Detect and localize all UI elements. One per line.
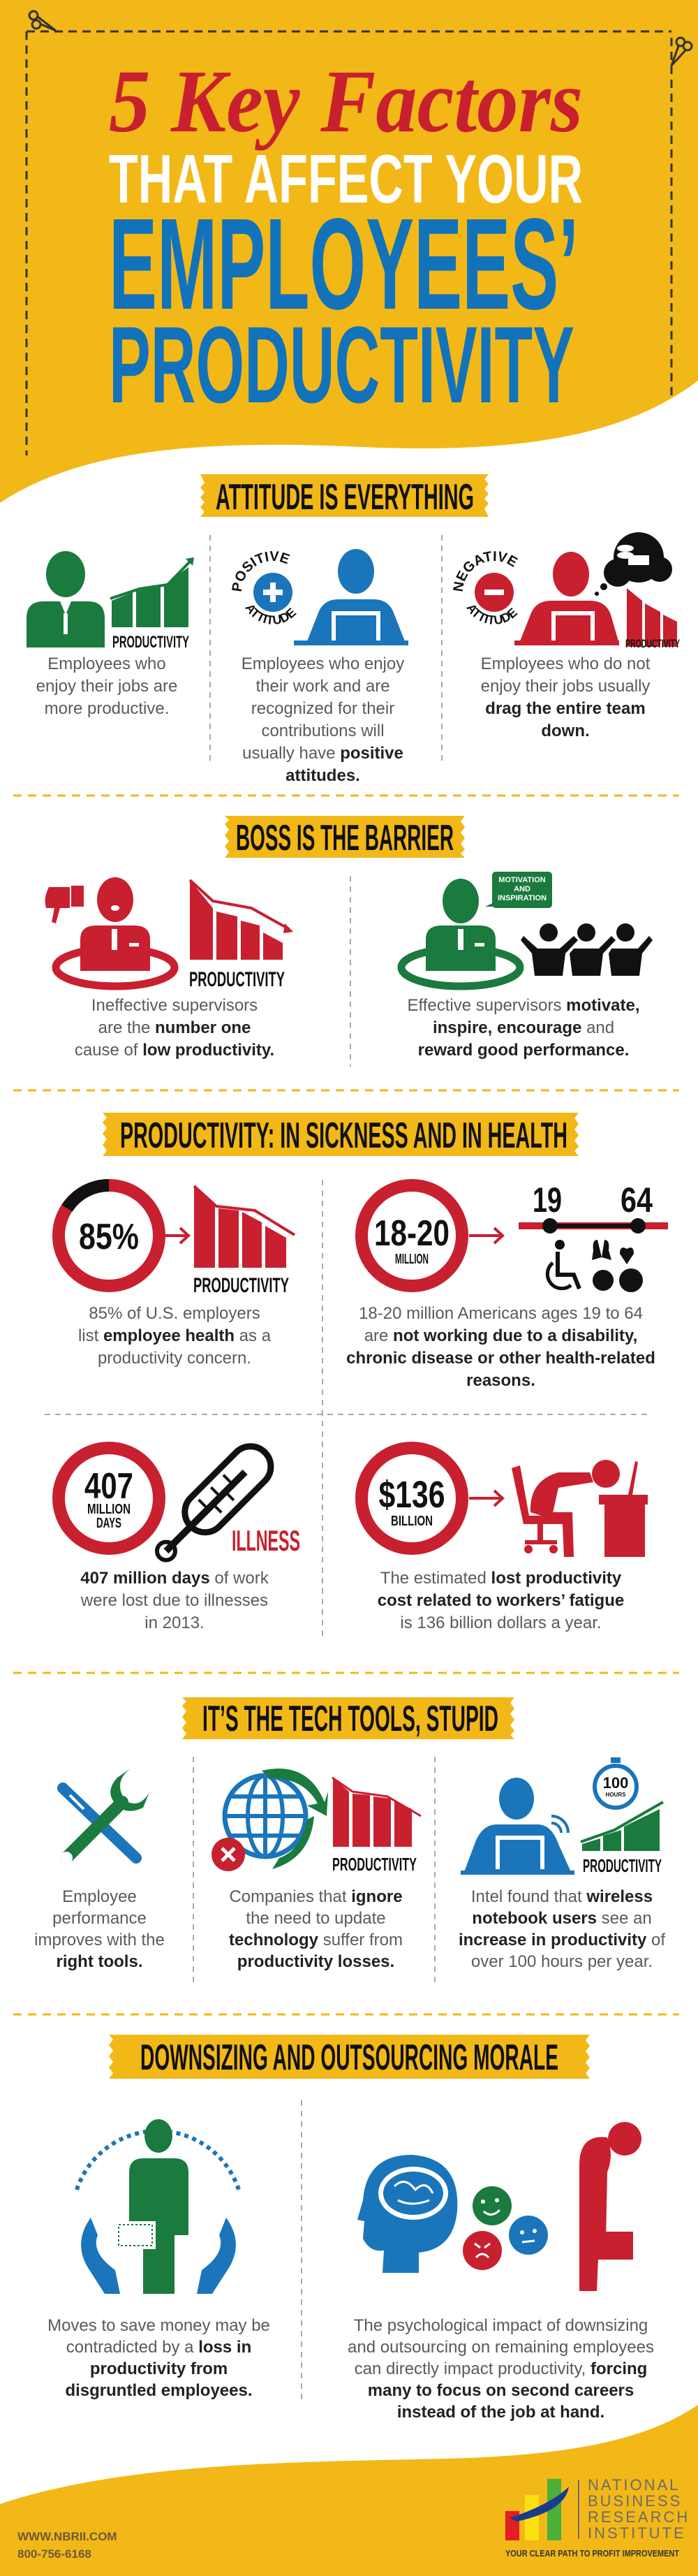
icon: scissors right: [671, 38, 692, 66]
banner: boss is the barrier: BOSS IS THE BARRIER: [236, 818, 454, 858]
title: [109, 52, 583, 426]
stat: 85%: 85%: [79, 1217, 139, 1257]
stat: 18-20 million: 18-20: [374, 1213, 450, 1254]
stat: $136 billion: $136: [378, 1474, 445, 1516]
icon: effective supervisor: AND: [514, 885, 530, 893]
text: effective supervisors: reward good performance.: [418, 1041, 629, 1060]
text: ineffective supervisors: cause of low productivity.: [75, 1041, 274, 1060]
text: ignore technology: productivity losses.: [237, 1952, 394, 1971]
icon: productivity drop chart: [332, 1778, 421, 1875]
text: intel wireless: Intel found that wireless: [471, 1887, 653, 1906]
text: effective supervisors: Effective supervisors motivate,: [407, 996, 640, 1015]
text: 18-20 million: [346, 1304, 655, 1390]
logo: national business research institute: NATIONAL: [588, 2476, 680, 2494]
icon: positive attitude: POSITIVE: [232, 551, 290, 592]
text: intel wireless: notebook users see an: [472, 1909, 652, 1928]
text: 85% employers: 85% of U.S. employers: [89, 1304, 260, 1323]
text: $136 billion: cost related to workers’ fatigue: [378, 1591, 624, 1610]
text: $136 billion: [378, 1569, 624, 1632]
stat: $136 billion: [362, 1448, 648, 1557]
text: attitude col 2: Employees who enjoy: [242, 654, 404, 673]
text: save money: Moves to save money may be: [47, 2316, 270, 2335]
text: attitude col 2: [242, 654, 405, 785]
footer contact: 800-756-6168: [17, 2547, 91, 2561]
text: save money: [47, 2316, 270, 2400]
icon: productivity drop chart: PRODUCTIVITY: [332, 1854, 417, 1875]
icon: positive attitude: [232, 549, 408, 645]
stat: 85%: [59, 1185, 295, 1297]
text: attitude col 2: contributions will: [261, 722, 385, 740]
footer background: [0, 2405, 698, 2576]
text: attitude col 2: their work and are: [255, 677, 390, 696]
icon: wireless notebook user: 100: [603, 1774, 628, 1792]
text: psychological impact: The psychological impact of downsizing: [354, 2316, 648, 2335]
text: attitude col 1: more productive.: [45, 699, 169, 718]
text: $136 billion: is 136 billion dollars a year.: [400, 1613, 602, 1632]
text: psychological impact: many to focus on second careers: [368, 2381, 634, 2400]
icon: scissors left: [29, 11, 56, 31]
text: 18-20 million: 18-20 million Americans ages 19 to 64: [359, 1304, 643, 1323]
icon: dejected worker: [579, 2122, 641, 2291]
stat: $136 billion: BILLION: [391, 1514, 433, 1529]
stat: 407 million days: ILLNESS: [232, 1524, 300, 1557]
text: tools: Employee: [62, 1887, 137, 1906]
icon: green employee with rising productivity: PRODUCTIVITY: [112, 633, 189, 652]
text: intel wireless: increase in productivity of: [459, 1931, 665, 1949]
icon: effective supervisor: [401, 872, 653, 986]
text: attitude col 2: recognized for their: [251, 699, 394, 718]
icon: negative attitude: ATTITUDE: [466, 605, 518, 624]
text: intel wireless: over 100 hours per year.: [471, 1952, 653, 1971]
logo: national business research institute: [505, 2476, 690, 2559]
text: 407 million days: in 2013.: [144, 1613, 205, 1632]
text: tools: [34, 1887, 165, 1971]
header background: [0, 0, 698, 531]
logo: national business research institute: RESEARCH: [588, 2508, 690, 2526]
stat: 407 million days: [59, 1438, 300, 1572]
text: attitude col 1: [36, 654, 177, 718]
stat: 407 million days: 407: [84, 1466, 133, 1507]
icon: ineffective supervisor: [45, 877, 293, 991]
icon: effective supervisor: MOTIVATION: [498, 876, 546, 884]
text: 18-20 million: are not working due to a disability,: [364, 1326, 637, 1345]
logo: national business research institute: BUSINESS: [588, 2492, 682, 2510]
text: ignore technology: technology suffer from: [229, 1931, 403, 1949]
text: psychological impact: instead of the job at hand.: [397, 2403, 604, 2422]
text: intel wireless: [459, 1887, 666, 1971]
icon: green employee with rising productivity: [27, 551, 194, 652]
text: 85% employers: list employee health as a: [78, 1326, 271, 1345]
text: 85% employers: [78, 1304, 271, 1368]
text: 18-20 million: reasons.: [466, 1371, 535, 1390]
icon: globe with update: [211, 1769, 328, 1871]
stat: 407 million days: DAYS: [96, 1516, 121, 1531]
text: ineffective supervisors: Ineffective supervisors: [91, 996, 258, 1015]
text: ineffective supervisors: are the number one: [98, 1018, 251, 1037]
text: tools: improves with the: [34, 1931, 165, 1949]
stat: 85%: PRODUCTIVITY: [193, 1274, 289, 1297]
icon: ineffective supervisor: PRODUCTIVITY: [189, 968, 285, 991]
text: attitude col 3: down.: [541, 722, 590, 740]
icon: negative attitude: [453, 532, 680, 650]
text: 407 million days: 407 million days of work: [80, 1569, 269, 1588]
text: attitude col 3: enjoy their jobs usually: [481, 677, 650, 696]
text: psychological impact: can directly impact productivity, forcing: [355, 2359, 647, 2378]
text: attitude col 3: Employees who do not: [481, 654, 650, 673]
icon: tools: [60, 1767, 149, 1864]
icon: protected employee: [77, 2119, 239, 2294]
banner: attitude is everything: [200, 474, 489, 518]
banner: tech tools: [182, 1697, 514, 1739]
stat: 18-20 million: 64: [621, 1180, 653, 1220]
icon: brain and emotions: [357, 2155, 548, 2273]
text: save money: productivity from: [90, 2359, 228, 2378]
text: 85% employers: productivity concern.: [98, 1349, 251, 1368]
banner: boss is the barrier: [225, 816, 465, 858]
text: tools: right tools.: [56, 1952, 142, 1971]
text: attitude col 3: [481, 654, 651, 740]
text: attitude col 1: enjoy their jobs are: [36, 677, 177, 696]
text: effective supervisors: inspire, encourage and: [433, 1018, 614, 1037]
stat: 18-20 million: [362, 1180, 668, 1292]
title: 5 Key Factors: [109, 52, 583, 151]
icon: negative attitude: NEGATIVE: [453, 551, 518, 592]
stat: 18-20 million: 19: [533, 1180, 562, 1220]
text: save money: contradicted by a loss in: [66, 2338, 251, 2357]
text: 18-20 million: chronic disease or other health-related: [346, 1349, 655, 1368]
text: ineffective supervisors: [75, 996, 274, 1060]
text: $136 billion: The estimated lost productivity: [380, 1569, 621, 1588]
text: ignore technology: Companies that ignore: [229, 1887, 403, 1906]
icon: positive attitude: ATTITUDE: [245, 605, 297, 624]
text: ignore technology: [229, 1887, 403, 1971]
text: tools: performance: [52, 1909, 147, 1928]
stat: 407 million days: MILLION: [87, 1502, 131, 1517]
icon: wireless notebook user: [461, 1757, 663, 1876]
dividers section 1: [210, 535, 442, 761]
icon: effective supervisor: INSPIRATION: [498, 894, 547, 902]
text: attitude col 3: drag the entire team: [485, 699, 646, 718]
text: effective supervisors: [407, 996, 640, 1060]
text: psychological impact: [348, 2316, 654, 2422]
text: attitude col 1: Employees who: [47, 654, 166, 673]
stat: 18-20 million: MILLION: [395, 1252, 429, 1267]
text: attitude col 2: usually have positive: [242, 744, 403, 763]
text: save money: disgruntled employees.: [65, 2381, 253, 2400]
footer contact: WWW.NBRII.COM: [17, 2530, 117, 2543]
banner: attitude is everything: ATTITUDE IS EVERYTHING: [216, 477, 474, 518]
text: psychological impact: and outsourcing on remaining employees: [348, 2338, 654, 2357]
logo: national business research institute: INSTITUTE: [588, 2524, 686, 2542]
text: 407 million days: were lost due to illnesses: [81, 1591, 268, 1610]
text: 407 million days: [80, 1569, 269, 1632]
text: ignore technology: the need to update: [246, 1909, 386, 1928]
footer contact: [17, 2530, 117, 2561]
text: attitude col 2: attitudes.: [285, 766, 360, 785]
icon: wireless notebook user: HOURS: [606, 1792, 626, 1798]
